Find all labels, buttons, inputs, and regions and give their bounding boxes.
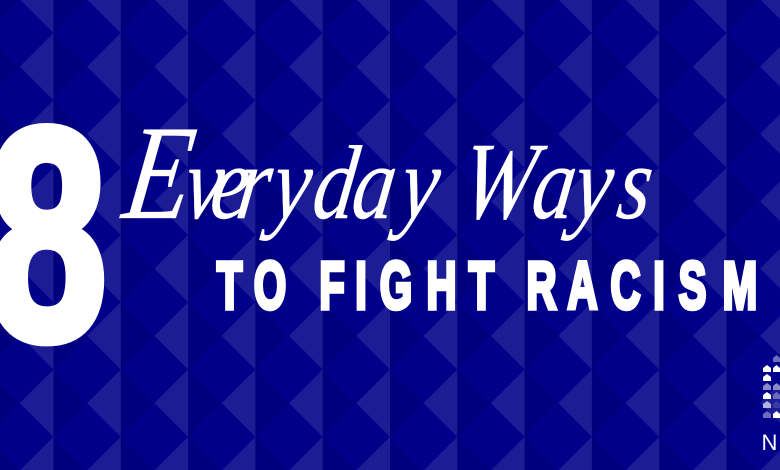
- wordmark letter: N: [762, 430, 777, 455]
- logo: house icon grid with cropped wordmark: [762, 355, 780, 455]
- heading: TO FIGHT RACISM: TO FIGHT RACISM: [217, 248, 757, 323]
- script heading: Everyday Ways: Everyday Ways: [115, 97, 664, 248]
- icon: house grid: [763, 355, 780, 418]
